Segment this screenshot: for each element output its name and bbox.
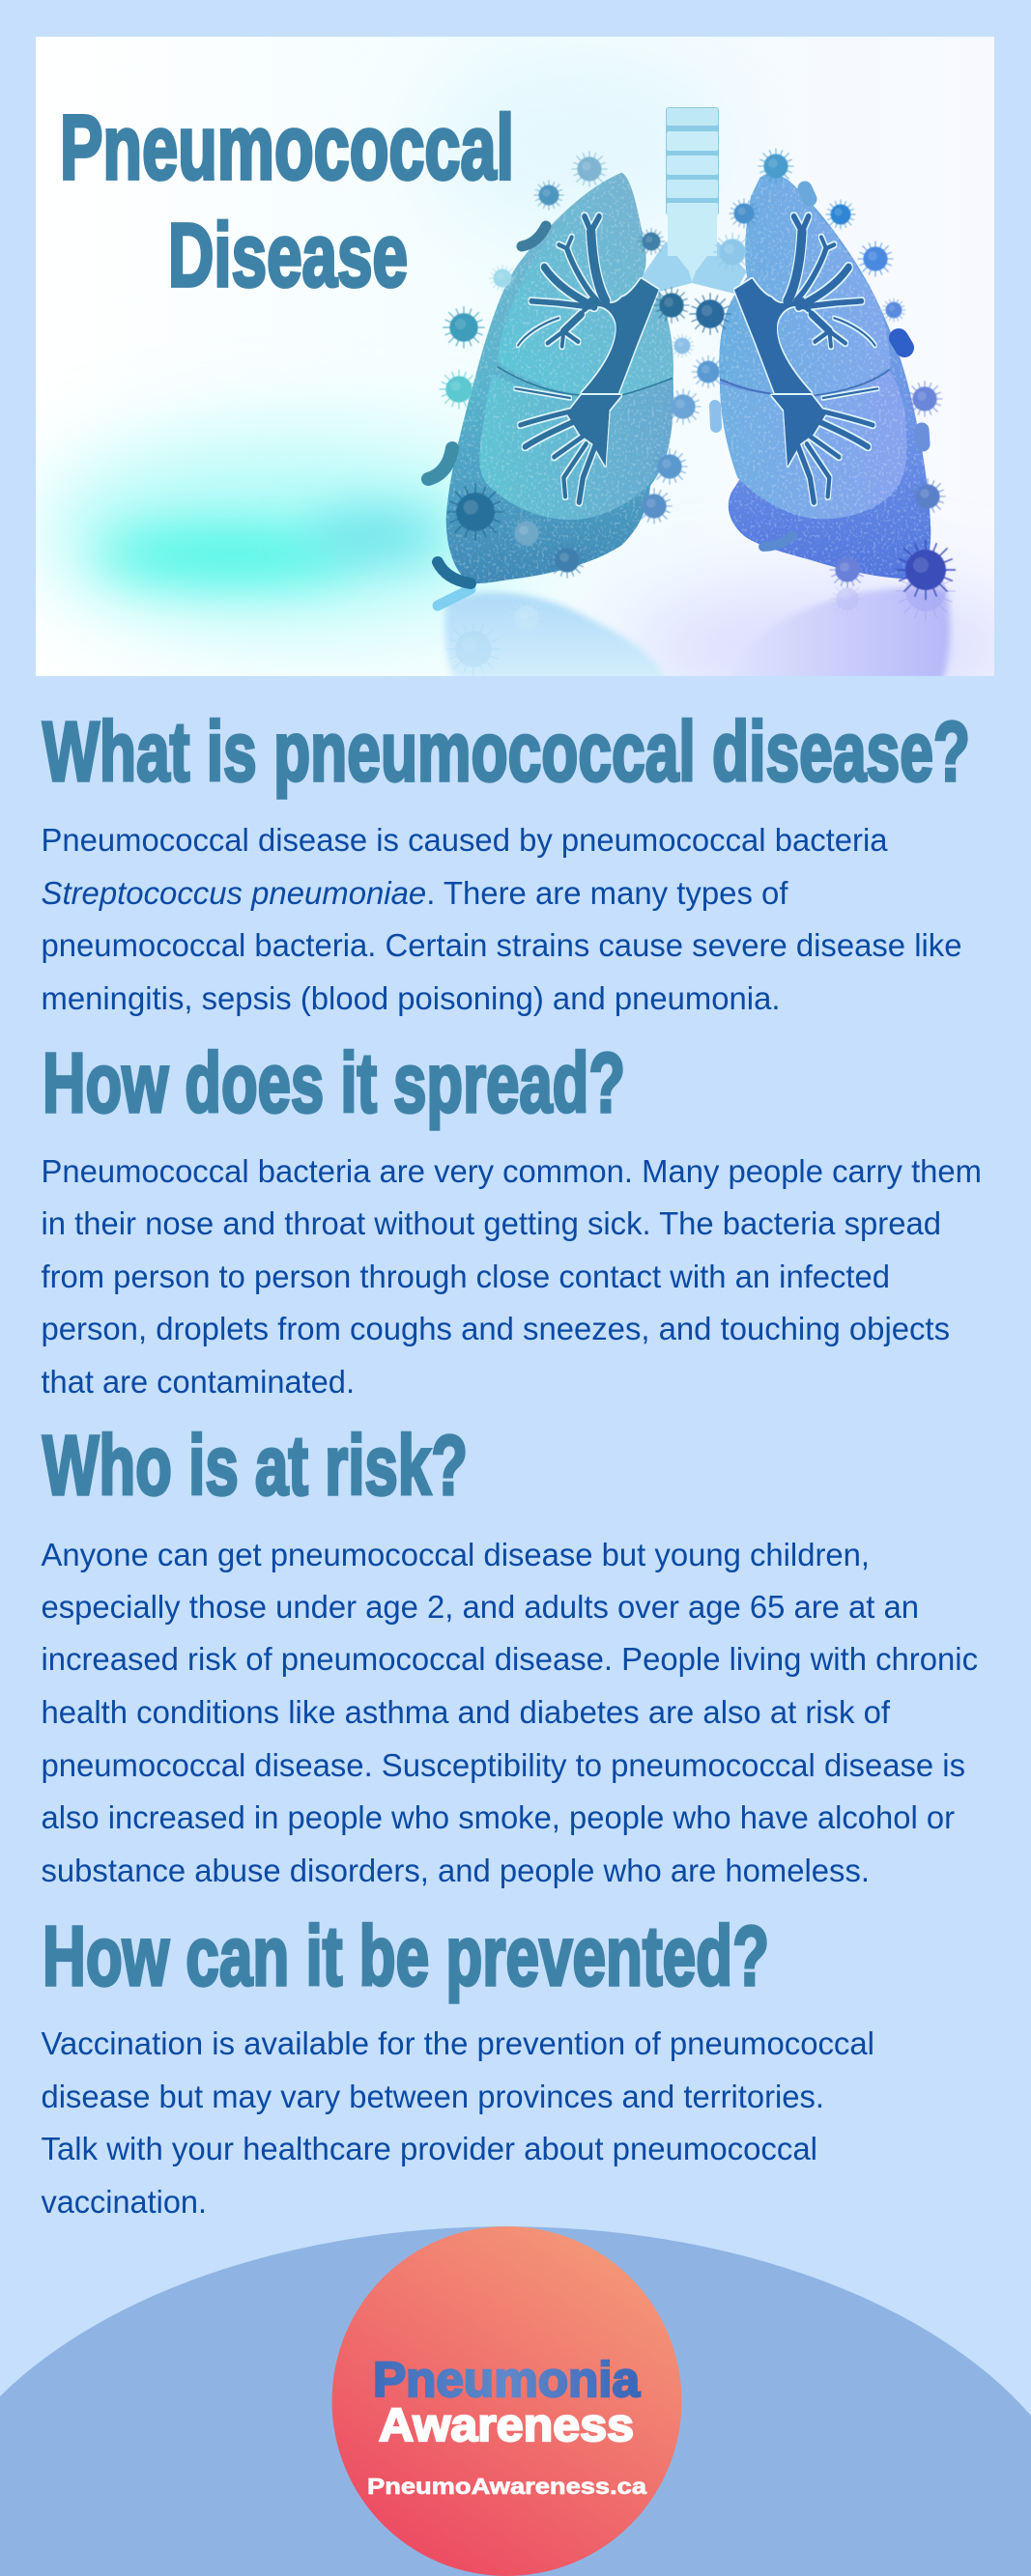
text block: who is at risk: Anyone can get pneumococcal disease but young children, (41, 1538, 870, 1573)
icon: left lung (446, 173, 673, 583)
text block: how can it be prevented: Vaccination is available for the prevention of pneumococcal (41, 2026, 874, 2062)
text block: who is at risk: health conditions like asthma and diabetes are also at risk of (41, 1695, 891, 1731)
text block: how does it spread: Pneumococcal bacteria are very common. Many people carry them (41, 1154, 982, 1190)
lung reflections (438, 561, 956, 681)
text block: how does it spread: person, droplets from coughs and sneezes, and touching objects (41, 1312, 950, 1347)
text block: who is at risk: especially those under age 2, and adults over age 65 are at an (41, 1590, 919, 1626)
text block: how does it spread: from person to person through close contact with an infected (41, 1260, 890, 1295)
title (60, 97, 514, 305)
text block: how does it spread: that are contaminated. (41, 1365, 355, 1401)
text block: who is at risk (41, 1538, 978, 1889)
title: Disease (168, 205, 408, 305)
icon: right lung (719, 174, 931, 580)
footer dome (0, 2226, 1031, 2576)
text block: how can it be prevented (41, 2026, 874, 2221)
text block: how does it spread: in their nose and throat without getting sick. The bacteria spread (41, 1206, 941, 1242)
icon: bacteria capsules (428, 188, 923, 583)
panel: hero image (36, 37, 1031, 700)
text block: who is at risk: substance abuse disorders, and people who are homeless. (41, 1854, 870, 1889)
logo word: pneumonia: Pneumonia (373, 2352, 641, 2407)
text block: how can it be prevented: disease but may vary between provinces and territories. (41, 2080, 824, 2115)
website: PneumoAwareness.ca (367, 2474, 646, 2499)
text block: who is at risk: increased risk of pneumococcal disease. People living with chronic (41, 1642, 978, 1678)
text block: who is at risk: pneumococcal disease. Susceptibility to pneumococcal disease is (41, 1748, 965, 1784)
text block: how can it be prevented: Talk with your healthcare provider about pneumococcal (41, 2132, 817, 2167)
text block: what is pneumococcal disease (41, 823, 962, 1017)
text block: what is pneumococcal disease: Streptococcus pneumoniae. There are many types of (41, 876, 788, 912)
text block: what is pneumococcal disease: meningitis, sepsis (blood poisoning) and pneumonia. (41, 981, 781, 1017)
text block: what is pneumococcal disease: pneumococcal bacteria. Certain strains cause severe disease like (41, 928, 962, 964)
icon: virus particles (440, 148, 956, 600)
heading: how can it be prevented: How can it be prevented? (43, 1910, 769, 2003)
heading: how does it spread: How does it spread? (43, 1036, 625, 1130)
heading: who is at risk: Who is at risk? (43, 1419, 468, 1513)
footer badge: pneumonia awareness (332, 2226, 682, 2576)
logo word: awareness: Awareness (379, 2400, 634, 2451)
text block: how does it spread (41, 1154, 982, 1401)
text block: how can it be prevented: vaccination. (41, 2185, 207, 2221)
text block: what is pneumococcal disease: Pneumococcal disease is caused by pneumococcal bacteria (41, 823, 888, 859)
text block: who is at risk: also increased in people who smoke, people who have alcohol or (41, 1800, 955, 1836)
title: Pneumococcal (60, 97, 514, 199)
icon: trachea (641, 107, 747, 294)
